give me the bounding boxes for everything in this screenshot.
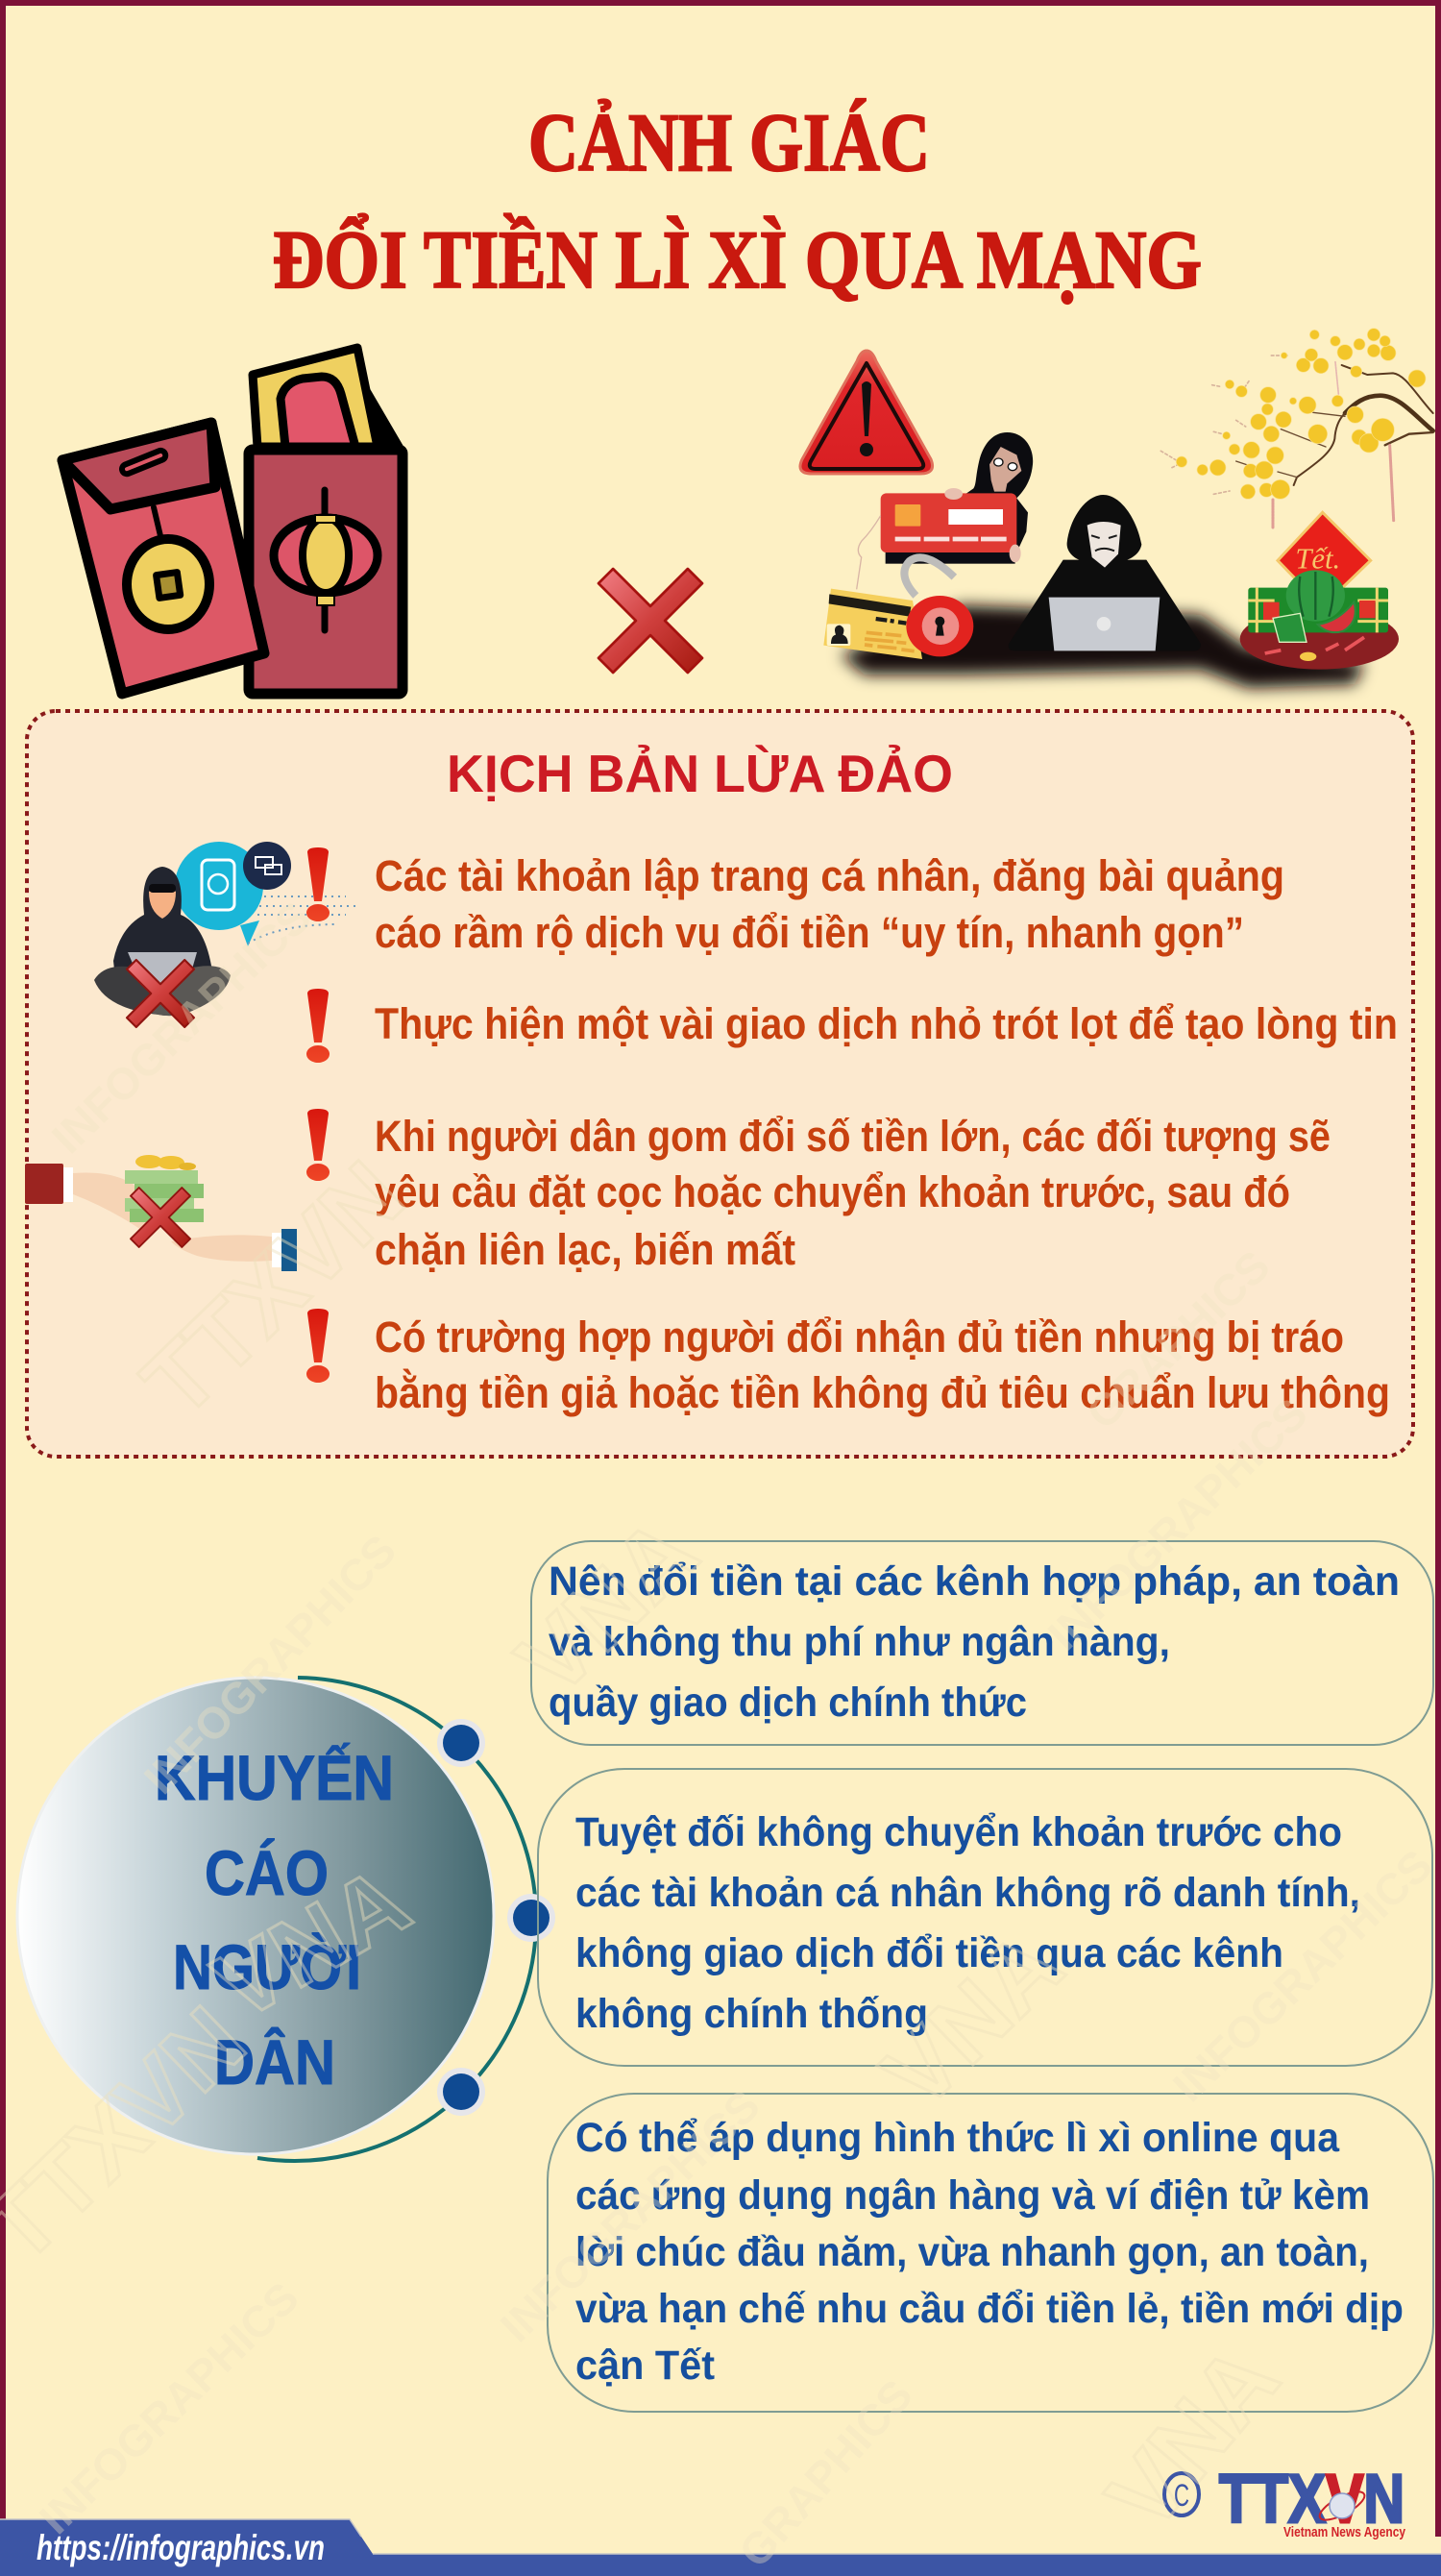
connector dot 2 [507, 1894, 555, 1942]
icon: ground shadow [841, 605, 1364, 688]
gradient circle [17, 1678, 494, 2154]
scenario text 3: chặn liên lạc, biến mất [375, 1225, 795, 1274]
scattered watermarks overlay: VNA [497, 1498, 718, 1716]
red X [131, 1188, 190, 1247]
footer band with url: https://infographics.vn [37, 2528, 325, 2567]
icon: hands exchanging money [25, 1155, 297, 1271]
advice box 1: Nên đổi tiền tại các kênh hợp pháp, an toàn [549, 1558, 1400, 1605]
blossoms [1176, 329, 1426, 499]
heading: KỊCH BẢN LỪA ĐẢO [447, 744, 953, 803]
scattered watermarks overlay: TTXVN [122, 1141, 424, 1437]
advice box 2 [538, 1769, 1432, 2066]
advice box 3: cận Tết [575, 2343, 715, 2389]
scenario text 3: yêu cầu đặt cọc hoặc chuyển khoản trước, sau đó [375, 1167, 1290, 1216]
footer band with url [0, 2519, 1441, 2576]
title: CẢNH GIÁC [528, 96, 930, 188]
logo: TTXVN: TTXVN [1219, 2462, 1404, 2538]
Tet tray [1240, 512, 1399, 670]
advice box 2: không chính thống [575, 1991, 928, 2037]
scattered watermarks overlay: INFOGRAPHICS [1163, 1840, 1441, 2111]
woman with bank card [857, 432, 1033, 589]
title: ĐỔI TIỀN LÌ XÌ QUA MẠNG [273, 212, 1202, 306]
scattered watermarks overlay: GRAPHICS [729, 2369, 922, 2576]
advice circle diagram [17, 1678, 555, 2161]
icon: open envelope with lantern [249, 348, 403, 694]
advice box 2: các tài khoản cá nhân không rõ danh tính, [575, 1870, 1360, 1916]
advice box 3: Có thể áp dụng hình thức lì xì online qua [575, 2115, 1340, 2161]
circle heading: DÂN [214, 2026, 335, 2098]
scattered watermarks overlay: INFOGRAPHICS [30, 2272, 308, 2543]
circle heading: NGƯỜI [173, 1931, 361, 2002]
scenario text 4: Có trường hợp người đổi nhận đủ tiền nhưng bị tráo [375, 1313, 1344, 1362]
icon: red envelopes [62, 348, 403, 694]
scattered watermarks overlay: INFOGRAPHICS [491, 2080, 769, 2351]
branch [1160, 356, 1433, 528]
circle heading [155, 1742, 394, 2098]
advice box 1: quầy giao dịch chính thức [549, 1680, 1027, 1726]
Tet tray: Tết. [1295, 543, 1340, 576]
icon: exclamation marks [306, 847, 330, 1383]
scenario text 3 [375, 1112, 1331, 1274]
scattered watermarks overlay: VNA [197, 1846, 427, 2041]
panel: scam scenarios [25, 711, 1413, 1457]
scenario text 1: cáo rầm rộ dịch vụ đổi tiền “uy tín, nhanh gọn” [375, 908, 1244, 957]
logo: TTXVN: C [1174, 2478, 1189, 2513]
icon: hacker with phone bubble [94, 842, 355, 1027]
advice box 2: Tuyệt đối không chuyển khoản trước cho [575, 1809, 1342, 1855]
scattered watermarks overlay: GRAPHICS [1077, 1240, 1280, 1438]
advice box 1: và không thu phí như ngân hàng, [549, 1619, 1170, 1665]
ID card and padlock [823, 557, 973, 659]
title [273, 96, 1202, 306]
icon: closed envelope with coin [62, 423, 264, 694]
scattered watermarks overlay: INFOGRAPHICS [1038, 1388, 1317, 1659]
icon: warning triangle [800, 351, 933, 474]
scenario text 1: Các tài khoản lập trang cá nhân, đăng bài quảng [375, 851, 1284, 900]
connector dot 3 [437, 2068, 485, 2116]
icon: apricot blossom branch and Tet tray [1160, 329, 1433, 670]
advice box 3: các ứng dụng ngân hàng và ví điện tử kèm [575, 2172, 1370, 2219]
scattered watermarks overlay: INFOGRAPHICS [134, 1525, 405, 1803]
scattered watermarks overlay [0, 892, 1441, 2576]
connector dot 1 [437, 1719, 485, 1767]
advice box 3: lời chúc đầu năm, vừa nhanh gọn, an toàn, [575, 2229, 1369, 2275]
icon: large red X [598, 569, 702, 673]
scattered watermarks overlay: VNA [1087, 2325, 1300, 2550]
red X [127, 960, 194, 1027]
scattered watermarks overlay: INFOGRAPHICS [42, 892, 321, 1163]
scenario text 4 [375, 1313, 1390, 1417]
logo: TTXVN: Vietnam News Agency [1283, 2524, 1406, 2540]
advice box 3: vừa hạn chế nhu cầu đổi tiền lẻ, tiền mới dịp [575, 2286, 1404, 2332]
advice box 1 [531, 1541, 1433, 1745]
scattered watermarks overlay: VNA [862, 1911, 1083, 2129]
circle heading: CÁO [205, 1837, 329, 1908]
circle heading: KHUYẾN [155, 1742, 394, 1813]
scenario text 1 [375, 851, 1284, 957]
advice box 2: không giao dịch đổi tiền qua các kênh [575, 1930, 1283, 1976]
orbit arc [257, 1678, 536, 2161]
advice box 3 [548, 2094, 1433, 2412]
hooded hacker with laptop [1009, 495, 1201, 650]
icon: hackers and card fraud [823, 432, 1201, 659]
scenario text 3: Khi người dân gom đổi số tiền lớn, các đối tượng sẽ [375, 1112, 1331, 1161]
